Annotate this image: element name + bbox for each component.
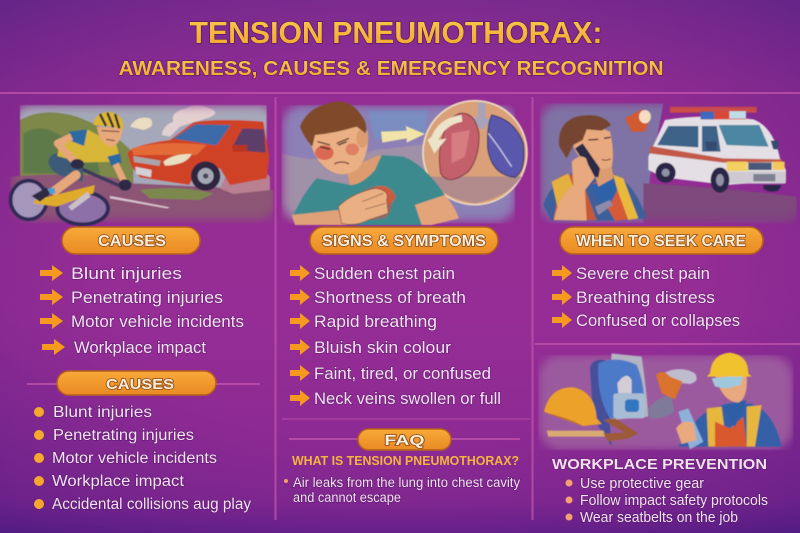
FAQ answer bbox=[284, 475, 520, 505]
lungs circle bbox=[423, 101, 527, 205]
when to seek care pill: WHEN TO SEEK CARE bbox=[576, 233, 746, 250]
FAQ question: WHAT IS TENSION PNEUMOTHORAX? bbox=[292, 453, 519, 468]
torso bbox=[293, 155, 445, 225]
causes pill bbox=[62, 227, 200, 254]
bicycle bbox=[11, 181, 47, 219]
illustration: cyclist and red car bbox=[10, 105, 273, 224]
signs and symptoms arrow list: Rapid breathing bbox=[314, 312, 437, 331]
signs and symptoms pill: SIGNS & SYMPTOMS bbox=[322, 233, 486, 250]
workplace prevention list: Use protective gear bbox=[580, 476, 704, 492]
causes bullet list: Blunt injuries bbox=[53, 404, 152, 421]
title bbox=[118, 15, 664, 80]
FAQ answer: and cannot escape bbox=[293, 490, 401, 505]
workplace prevention list: Follow impact safety protocols bbox=[580, 493, 768, 509]
signs and symptoms arrow list: Shortness of breath bbox=[314, 288, 466, 307]
ambulance bbox=[648, 116, 786, 185]
causes bullet list bbox=[34, 404, 251, 513]
head bbox=[312, 123, 368, 174]
illustration: man calling ambulance bbox=[540, 103, 797, 223]
signs and symptoms arrow list bbox=[290, 264, 501, 408]
illustration: man with chest pain and lungs bbox=[282, 101, 527, 225]
person bbox=[543, 173, 647, 221]
workplace prevention list: Wear seatbelts on the job bbox=[580, 510, 738, 526]
signs and symptoms arrow list: Neck veins swollen or full bbox=[314, 389, 501, 408]
when to seek care arrow list: Severe chest pain bbox=[576, 264, 710, 283]
when to seek care arrow list bbox=[552, 264, 740, 330]
causes bullet list: Accidental collisions aug play bbox=[52, 496, 251, 513]
causes bullet list: Workplace impact bbox=[52, 473, 185, 490]
when to seek care arrow list: Confused or collapses bbox=[576, 311, 740, 330]
causes arrow list bbox=[40, 264, 244, 357]
illustration: workplace safety gear and worker bbox=[538, 353, 793, 450]
signs and symptoms pill bbox=[310, 227, 498, 254]
FAQ pill: FAQ bbox=[384, 432, 425, 449]
causes arrow list: Blunt injuries bbox=[71, 264, 182, 283]
signs and symptoms arrow list: Faint, tired, or confused bbox=[314, 364, 491, 383]
causes arrow list: Penetrating injuries bbox=[71, 288, 223, 307]
signs and symptoms arrow list: Sudden chest pain bbox=[314, 264, 455, 283]
signs and symptoms arrow list: Bluish skin colour bbox=[314, 338, 451, 357]
FAQ pill bbox=[358, 429, 451, 450]
second causes pill: CAUSES bbox=[106, 376, 174, 393]
causes bullet list: Motor vehicle incidents bbox=[52, 450, 217, 467]
title: TENSION PNEUMOTHORAX: bbox=[190, 15, 602, 50]
when to seek care pill bbox=[560, 227, 763, 254]
rider bbox=[48, 153, 83, 182]
causes arrow list: Workplace impact bbox=[74, 338, 206, 357]
workplace prevention heading: WORKPLACE PREVENTION bbox=[552, 456, 767, 473]
title: AWARENESS, CAUSES & EMERGENCY RECOGNITION bbox=[118, 57, 664, 80]
workplace prevention list bbox=[566, 476, 768, 526]
causes arrow list: Motor vehicle incidents bbox=[71, 312, 244, 331]
second causes pill bbox=[57, 371, 216, 395]
causes pill: CAUSES bbox=[98, 233, 166, 250]
causes bullet list: Penetrating injuries bbox=[53, 427, 194, 444]
when to seek care arrow list: Breathing distress bbox=[576, 288, 715, 307]
FAQ answer: Air leaks from the lung into chest cavity bbox=[293, 475, 520, 490]
